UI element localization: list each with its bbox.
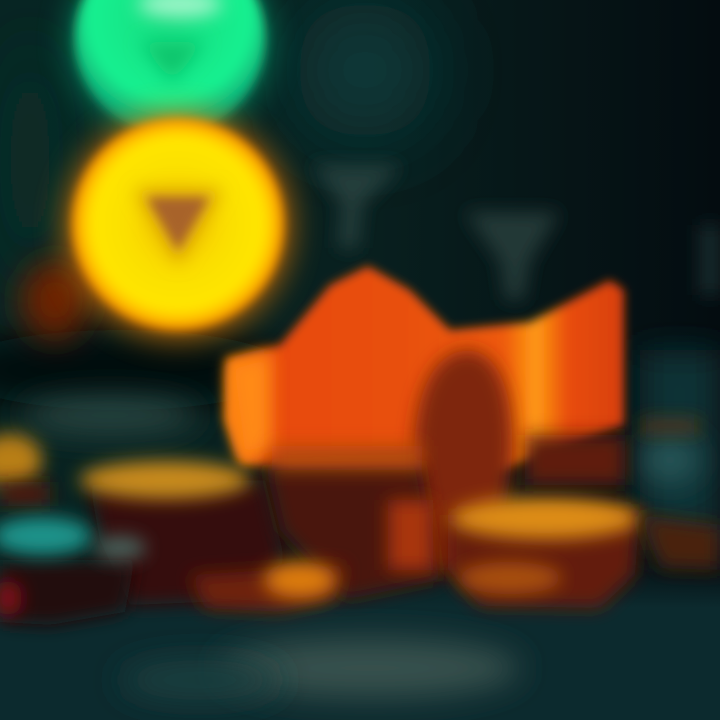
bowls bbox=[0, 420, 720, 625]
faint glasses in background bbox=[312, 165, 720, 300]
icon: green glowing circle bbox=[70, 0, 270, 140]
left teal bowl bbox=[0, 560, 135, 625]
centre block bbox=[265, 460, 440, 600]
right bowl bbox=[448, 510, 640, 608]
orange crown shape bbox=[224, 266, 624, 570]
icon: yellow glowing circle with triangle bbox=[66, 114, 290, 338]
orange glow left of yellow circle bbox=[21, 260, 89, 340]
lower bowl bbox=[190, 565, 345, 612]
right edge dish bbox=[640, 515, 720, 570]
left small bowl bbox=[0, 434, 42, 486]
centre-left large bowl bbox=[90, 480, 285, 605]
